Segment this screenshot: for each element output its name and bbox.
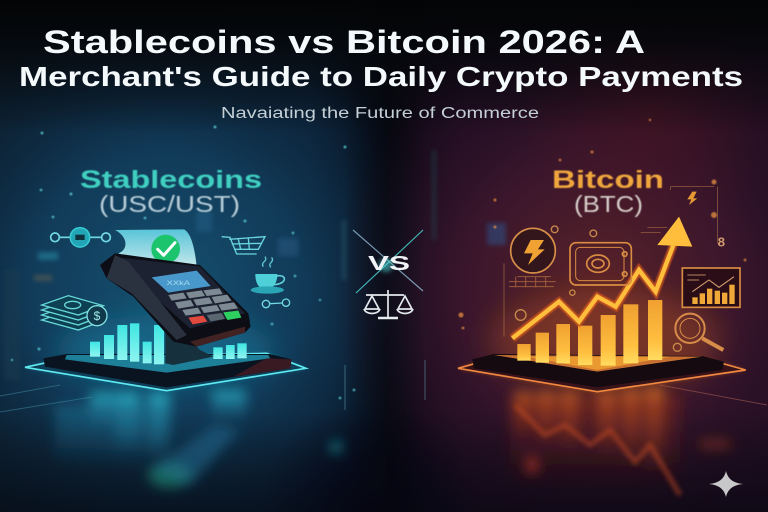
icon: dollar coin: $ — [94, 309, 101, 323]
small circles and bolt — [504, 187, 717, 351]
bars: cyan — [90, 323, 247, 364]
reflection: arrow zigzag — [515, 405, 680, 495]
icon: network node — [51, 228, 110, 247]
digit 8: 8 — [718, 234, 725, 249]
icon: circuit — [509, 277, 556, 287]
terminal screen — [152, 271, 211, 293]
heading: stablecoins: Stablecoins — [80, 166, 262, 194]
glows behind the illustrations — [55, 290, 720, 390]
terminal screen: XXkA — [167, 280, 191, 287]
title line 1: Stablecoins vs Bitcoin 2026: A — [43, 24, 645, 60]
icon: magnifier — [675, 314, 723, 350]
bars: orange — [517, 300, 662, 366]
receipt — [115, 229, 197, 267]
rising arrow — [512, 217, 692, 338]
subheading: BTC: (BTC) — [574, 191, 643, 217]
terminal keypad — [168, 288, 241, 324]
subtitle: Navaiating the Future of Commerce — [221, 105, 539, 122]
platform: glowing base — [25, 353, 306, 391]
watermark sparkle — [709, 471, 743, 497]
title line 2: Merchant's Guide to Daily Crypto Payments — [19, 61, 743, 92]
terminal stand — [165, 323, 213, 365]
icon: cash stack — [42, 296, 103, 330]
reflection: stablecoin platform — [55, 390, 342, 488]
perspective lines — [0, 360, 767, 412]
center: versus — [353, 230, 423, 318]
icon: green check — [151, 235, 180, 263]
bitcoin illustration — [458, 187, 746, 392]
vs flare lines — [353, 230, 423, 293]
title — [19, 24, 743, 92]
panel: bitcoin — [458, 166, 746, 495]
icon: balance scales — [364, 290, 413, 318]
vs label: VS — [368, 253, 410, 275]
subheading: USC/UST: (USC/UST) — [99, 191, 240, 217]
icon: coffee cup — [251, 257, 284, 294]
icon: link nodes — [262, 299, 290, 308]
icon: shopping cart — [222, 237, 265, 254]
icon: chart panel — [682, 268, 740, 307]
icon: lightning circle — [511, 228, 555, 273]
stablecoin illustration — [25, 228, 306, 391]
platform: glowing base — [458, 354, 746, 392]
heading: bitcoin: Bitcoin — [552, 166, 664, 194]
icon: vault — [570, 243, 631, 285]
reflection: bitcoin platform — [510, 388, 730, 490]
payment terminal — [100, 253, 251, 347]
icon: dollar coin — [87, 306, 107, 326]
panel: stablecoins — [25, 166, 342, 488]
